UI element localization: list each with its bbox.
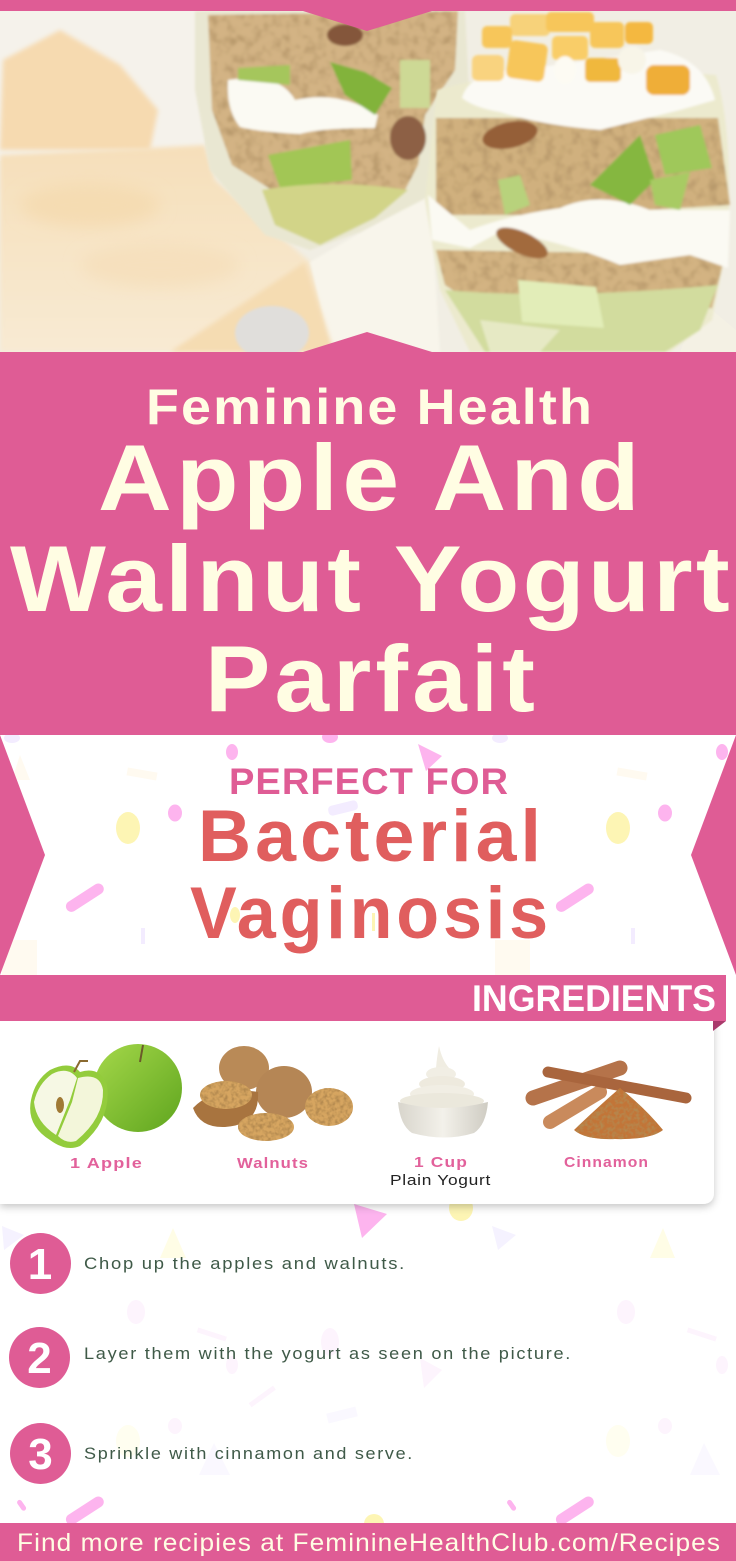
photo: spoon xyxy=(235,306,309,360)
step 1 xyxy=(10,1233,406,1294)
top pink band with notch xyxy=(0,0,736,31)
label: PERFECT FOR: PERFECT FOR xyxy=(229,761,509,802)
ingredients banner xyxy=(0,975,726,1031)
photo: gel cubes topping xyxy=(472,12,690,95)
photo: peach towel fold xyxy=(0,30,158,150)
ingredients card xyxy=(0,1021,714,1204)
icon: apple xyxy=(30,1044,182,1148)
title panel xyxy=(0,332,736,735)
photo: towel xyxy=(0,145,330,352)
photo: back glass xyxy=(195,11,470,250)
footer band xyxy=(0,1523,736,1561)
step 3: 3 xyxy=(28,1430,53,1479)
label: 1 Apple: 1 Apple xyxy=(70,1155,143,1172)
photo: white stripe xyxy=(310,192,440,352)
step 1: 1 xyxy=(28,1240,52,1289)
photo: apple walnut yogurt parfaits xyxy=(0,11,736,360)
icon: cinnamon xyxy=(533,1068,686,1139)
confetti lower section xyxy=(2,1195,728,1534)
step 2: 2 xyxy=(27,1334,52,1383)
icon: walnuts xyxy=(193,1046,353,1141)
step 3 xyxy=(10,1423,414,1484)
subtitle: Feminine Health: Feminine Health xyxy=(146,379,594,435)
photo: front glass xyxy=(425,12,730,352)
label: 1 Cup: 1 Cup xyxy=(414,1154,468,1171)
heading: INGREDIENTS: INGREDIENTS xyxy=(472,978,716,1019)
photo: lower granola xyxy=(436,250,725,308)
confetti background xyxy=(2,731,728,1534)
photo: top yogurt xyxy=(462,50,715,130)
title line: Apple And: Apple And xyxy=(98,425,644,530)
step 2 xyxy=(9,1327,572,1388)
label: Cinnamon: Cinnamon xyxy=(564,1154,649,1171)
footer band: Find more recipies at FeminineHealthClub.com/Recipes xyxy=(17,1529,721,1557)
heading: Bacterial: Bacterial xyxy=(198,796,545,877)
label: Walnuts: Walnuts xyxy=(237,1155,309,1172)
photo: bottom apple layer xyxy=(445,285,718,352)
title line: Parfait: Parfait xyxy=(205,626,539,731)
title line: Walnut Yogurt: Walnut Yogurt xyxy=(10,526,733,631)
ribbon: perfect for xyxy=(0,735,736,975)
photo: apple cubes xyxy=(590,135,655,205)
photo: upper granola xyxy=(436,118,730,215)
label: Plain Yogurt: Plain Yogurt xyxy=(390,1172,491,1189)
heading: Vaginosis: Vaginosis xyxy=(190,873,552,954)
step 3: Sprinkle with cinnamon and serve. xyxy=(84,1444,414,1463)
photo: almonds xyxy=(480,116,540,154)
step 2: Layer them with the yogurt as seen on the picture. xyxy=(84,1344,572,1363)
photo: middle yogurt xyxy=(428,195,730,268)
step 1: Chop up the apples and walnuts. xyxy=(84,1254,406,1273)
icon: yogurt xyxy=(398,1046,488,1138)
